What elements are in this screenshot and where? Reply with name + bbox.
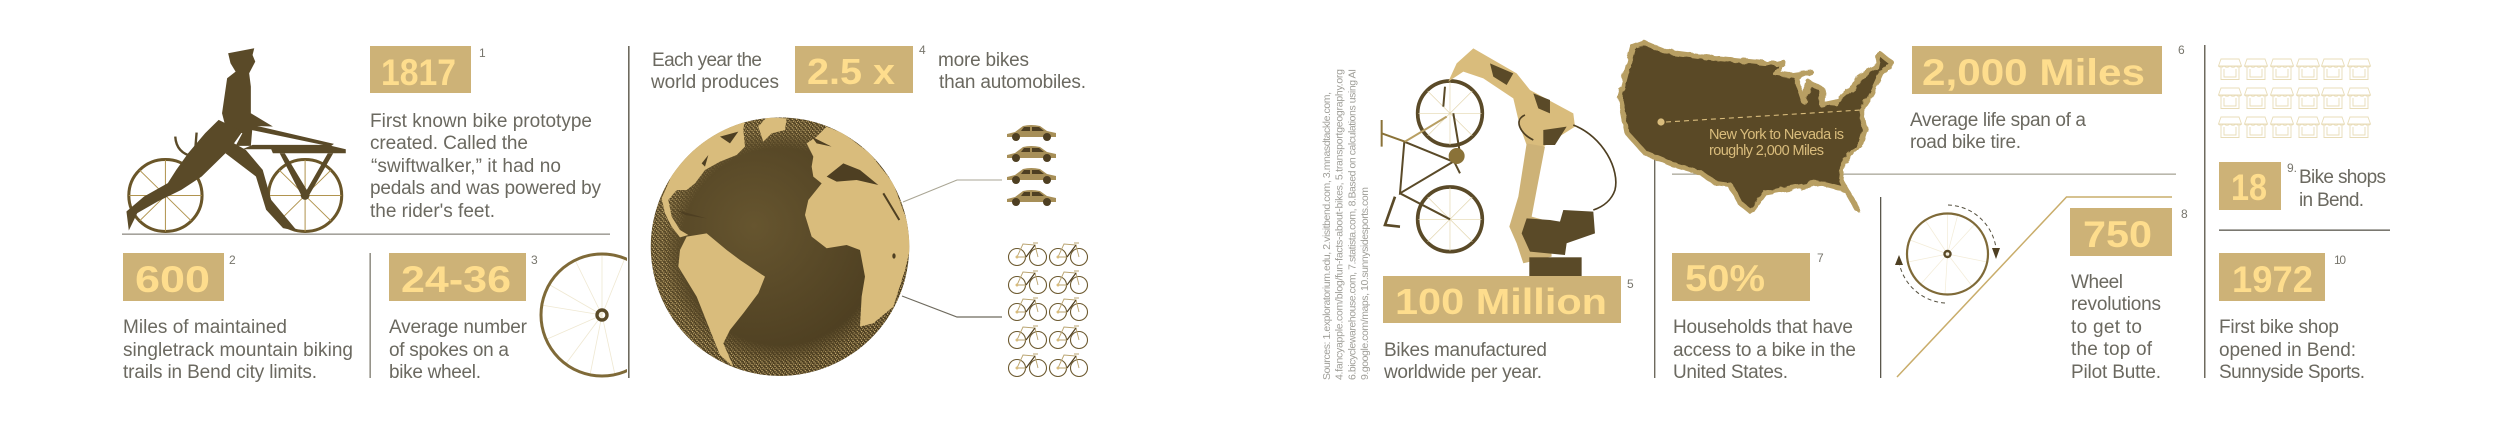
stat: 1972 first bike shop: Sunnyside Sports.	[2219, 362, 2365, 383]
stat: 50 percent: Households that have	[1673, 317, 1853, 338]
stat: 100 million: worldwide per year.	[1383, 362, 1542, 383]
stat: 2.5 x: 2.5 x	[807, 51, 895, 92]
arm	[1448, 48, 1616, 277]
text: each year the world produces: world produces	[650, 72, 779, 93]
icons: bikes	[1008, 243, 1088, 376]
stat: 24-36 spokes: of spokes on a	[389, 340, 509, 361]
panel: world production	[650, 43, 1088, 376]
connector: bikes	[902, 296, 1002, 317]
text: more bikes than automobiles: than automobiles.	[939, 72, 1086, 93]
stat: 50 percent: access to a bike in the	[1673, 340, 1856, 361]
stat: 750 revolutions: Wheel	[2071, 272, 2123, 293]
stat: 24-36 spokes: 24-36	[401, 259, 511, 300]
stat: 24-36 spokes: 3	[531, 253, 538, 267]
map label: roughly 2,000 Miles	[1709, 143, 1824, 159]
sources: Sources: 1.exploratorium.edu, 2.visitbend.com, 3.mnasdtackle.com,	[1321, 92, 1333, 380]
stat: 600 miles of singletrack	[123, 253, 353, 383]
bike	[1382, 81, 1482, 252]
land: south america	[678, 233, 765, 367]
land: europe and africa	[805, 127, 911, 327]
text: more bikes than automobiles: more bikes	[938, 50, 1029, 71]
stat: 24-36 spokes	[389, 253, 538, 383]
stat: 750 revolutions: the top of	[2071, 339, 2153, 360]
illustration: swiftwalker draisine and rider	[126, 48, 346, 231]
stat: 2,000 miles: 2,000 Miles	[1922, 52, 2145, 93]
stat: 18 bike shops	[2219, 161, 2386, 211]
stat: 50 percent	[1672, 251, 1856, 383]
stat: 600 miles of singletrack: singletrack mountain biking	[123, 340, 353, 361]
diagram: wheel on hill	[1895, 197, 2172, 377]
stat: 600 miles of singletrack: trails in Bend city limits.	[123, 362, 317, 383]
stat: 1817: 1	[479, 46, 486, 60]
route line	[1657, 110, 1861, 126]
connector: cars	[903, 180, 1002, 202]
stat: 100 million: Bikes manufactured	[1384, 340, 1547, 361]
stat: 600 miles of singletrack: 2	[229, 253, 236, 267]
stat: 2.5 x	[795, 43, 926, 93]
stat: 750 revolutions: 8	[2181, 207, 2188, 221]
stat: 100 million	[1383, 276, 1634, 383]
sources: 9.google.com/maps, 10.sunnysidesports.com	[1359, 187, 1371, 380]
icons: cars	[1007, 125, 1056, 206]
stat: 1972 first bike shop: First bike shop	[2219, 317, 2339, 338]
stat: 2,000 miles: Average life span of a	[1910, 110, 2086, 131]
stat: 2.5 x: 4	[919, 43, 926, 57]
stat: 1972 first bike shop	[2219, 253, 2365, 383]
stat: 2,000 miles	[1910, 43, 2185, 153]
stat: 600 miles of singletrack: Miles of maintained	[123, 317, 287, 338]
text: first known bike: “swiftwalker,” it had no	[371, 156, 561, 177]
stat: 600 miles of singletrack: 600	[135, 259, 210, 300]
text: first known bike	[370, 111, 602, 222]
stat: 50 percent: 50%	[1685, 258, 1765, 299]
stat: 750 revolutions	[2070, 207, 2188, 383]
stat: 24-36 spokes: bike wheel.	[389, 362, 481, 383]
stat: 1817	[370, 46, 486, 93]
text: first known bike: pedals and was powered by	[370, 178, 602, 199]
stat: 1972 first bike shop: 1972	[2232, 259, 2313, 300]
stat: 18 bike shops: in Bend.	[2299, 190, 2364, 211]
text: first known bike: the rider's feet.	[370, 201, 495, 222]
sources	[1321, 69, 1371, 380]
icons: bike shops	[2218, 59, 2370, 138]
map label: New York to Nevada is	[1709, 127, 1844, 143]
stat: 24-36 spokes: Average number	[389, 317, 528, 338]
stat: 18 bike shops: Bike shops	[2299, 167, 2386, 188]
stat: 50 percent: 7	[1817, 251, 1824, 265]
stat: 1972 first bike shop: 10	[2334, 253, 2346, 267]
illustration: robot arm holding bike	[1382, 48, 1616, 277]
stat: 2,000 miles: 6	[2178, 43, 2185, 57]
text: each year the world produces	[650, 50, 779, 93]
land: north america	[662, 117, 745, 237]
map: united states	[1620, 43, 1892, 212]
stat: 1817: 1817	[381, 52, 456, 93]
sources: 4.fancyapple.com/blog/fun-facts-about-bikes, 5.transportgeography.org	[1334, 69, 1346, 380]
stat: 50 percent: United States.	[1673, 362, 1788, 383]
stat: 100 million: 5	[1627, 277, 1634, 291]
illustration: globe	[651, 117, 911, 376]
stat: 750 revolutions: to get to	[2071, 317, 2142, 338]
stat: 750 revolutions: 750	[2083, 214, 2152, 255]
stat: 2,000 miles: road bike tire.	[1910, 132, 2021, 153]
text: first known bike: First known bike prototype	[370, 111, 592, 132]
stat: 750 revolutions: Pilot Butte.	[2071, 362, 2161, 383]
stat: 100 million: 100 Million	[1395, 281, 1607, 322]
text: more bikes than automobiles	[938, 50, 1086, 93]
text: each year the world produces: Each year the	[652, 50, 762, 71]
map label	[1709, 127, 1844, 159]
stat: 18 bike shops: 9.	[2287, 161, 2297, 175]
stat: 750 revolutions: revolutions	[2071, 294, 2161, 315]
icon: bike wheel	[540, 252, 627, 378]
panel: history	[126, 46, 601, 231]
sources: 6.bicyclewarehouse.com, 7.statista.com, 8.Based on calculations using AI	[1346, 69, 1358, 380]
stat: 18 bike shops: 18	[2231, 167, 2267, 208]
text: first known bike: created. Called the	[370, 133, 528, 154]
stat: 1972 first bike shop: opened in Bend:	[2219, 340, 2356, 361]
